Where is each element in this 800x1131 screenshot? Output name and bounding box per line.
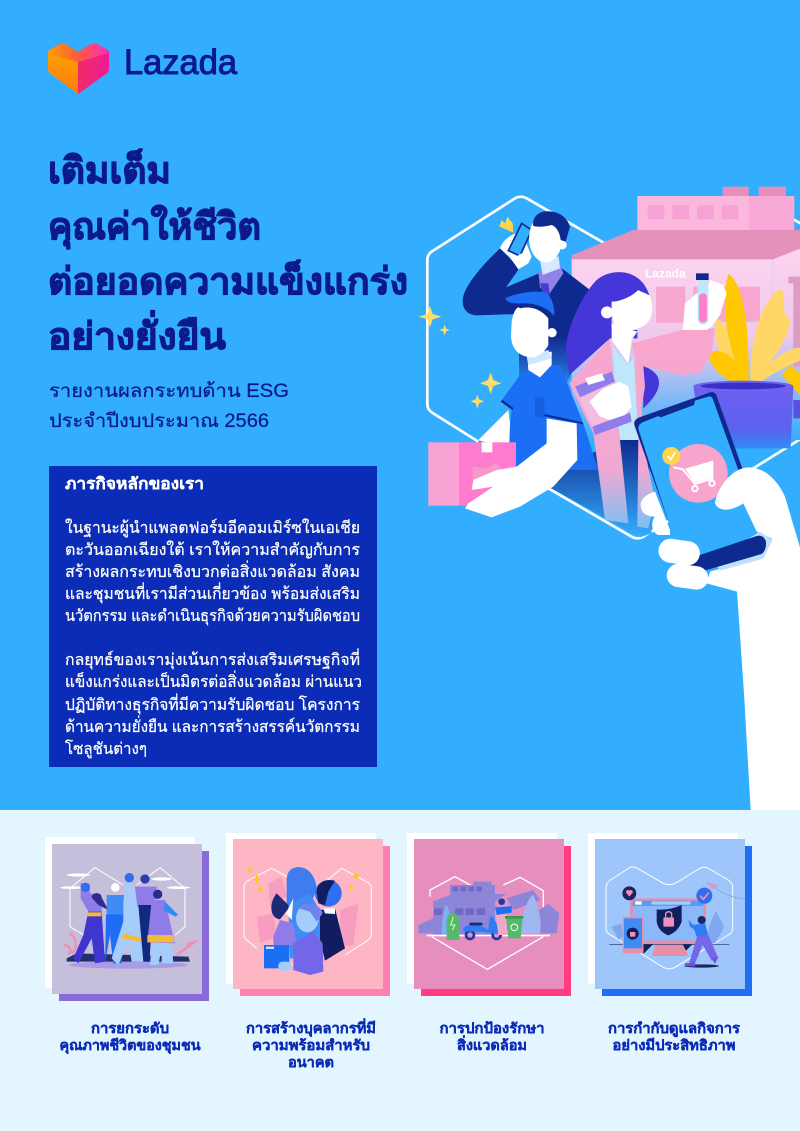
title: คุณค่าให้ชีวิต xyxy=(48,204,261,250)
man in suit xyxy=(463,211,590,383)
test tube xyxy=(698,279,708,324)
suit xyxy=(463,248,590,383)
caption xyxy=(246,1018,376,1070)
card face xyxy=(414,839,564,989)
paragraph 1: นวัตกรรม และดำเนินธุรกิจด้วยความรับผิดชอบ xyxy=(65,607,360,626)
caption: อนาคต xyxy=(288,1054,334,1070)
icon: Lazada heart xyxy=(48,44,109,94)
scooter xyxy=(465,930,475,940)
paragraph 2: ด้านความยั่งยืน และการสร้างสรรค์นวัตกรรม xyxy=(65,715,360,736)
cart badge xyxy=(669,444,728,503)
caption: การปกป้องรักษา xyxy=(440,1020,544,1036)
paragraph 2: ปฏิบัติทางธุรกิจที่มีความรับผิดชอบ โครงการ xyxy=(65,693,360,715)
icon: group of friends xyxy=(60,868,195,969)
panel: people xyxy=(226,833,390,1070)
face xyxy=(612,290,652,330)
woman in pink coat xyxy=(566,272,727,528)
plant xyxy=(708,274,800,395)
paragraph 2: โซลูชันต่างๆ xyxy=(65,739,147,759)
bin xyxy=(506,917,523,938)
holding hand and arm xyxy=(657,467,800,810)
caption: คุณภาพชีวิตของชุมชน xyxy=(60,1037,201,1054)
shield xyxy=(657,905,682,935)
caption: การยกระดับ xyxy=(91,1020,169,1036)
box xyxy=(428,442,459,506)
blouse xyxy=(613,347,638,440)
hair xyxy=(566,272,649,375)
panel background xyxy=(49,466,377,767)
woman xyxy=(287,867,317,907)
card white back xyxy=(45,837,195,988)
hair xyxy=(533,211,570,242)
caption: การกำกับดูแลกิจการ xyxy=(608,1020,741,1037)
caption xyxy=(60,1020,201,1054)
palm shadow xyxy=(713,532,773,571)
charger xyxy=(447,913,459,940)
caption: การสร้างบุคลากรที่มี xyxy=(246,1018,376,1037)
neck xyxy=(539,257,560,275)
friend 5 xyxy=(153,890,162,899)
badges xyxy=(622,886,636,900)
subtitle xyxy=(49,381,289,432)
panel: our mission xyxy=(49,466,377,767)
store chimneys xyxy=(723,187,749,197)
subtitle: ประจำปีงบประมาณ 2566 xyxy=(49,410,269,432)
friend 4 xyxy=(140,874,150,884)
friend 2 xyxy=(111,883,120,892)
store upper floor xyxy=(637,196,749,231)
caption: อย่างมีประสิทธิภาพ xyxy=(612,1037,736,1053)
logo wordmark: Lazada xyxy=(124,43,238,82)
caption xyxy=(440,1020,544,1053)
card shadow xyxy=(421,846,571,996)
card face xyxy=(52,844,202,994)
carrying arm and hand xyxy=(465,418,577,517)
panel: governance xyxy=(588,833,752,1053)
fingers xyxy=(657,537,701,567)
raised hand xyxy=(683,280,727,330)
panel: community xyxy=(45,837,209,1054)
phone frame xyxy=(634,392,769,574)
phone screen xyxy=(638,397,762,563)
person xyxy=(498,898,505,905)
coat xyxy=(569,328,715,528)
caption: ความพร้อมสำหรับ xyxy=(252,1037,370,1053)
lower floor shade xyxy=(548,440,652,537)
background: blue upper section xyxy=(0,0,800,810)
flash lines xyxy=(499,217,513,233)
card shadow xyxy=(602,846,752,996)
head xyxy=(529,214,562,262)
card face xyxy=(233,839,383,989)
card white back xyxy=(226,833,376,984)
person xyxy=(684,964,719,968)
sparkles xyxy=(419,306,501,409)
shirt xyxy=(501,365,598,470)
icon: workforce team xyxy=(244,867,371,975)
hair xyxy=(520,303,557,332)
title: เติมเต็ม xyxy=(48,147,171,191)
title: อย่างยั่งยืน xyxy=(48,310,226,357)
left fingertips xyxy=(641,492,670,535)
phone in hand xyxy=(634,392,769,574)
store windows xyxy=(656,287,685,323)
left arm xyxy=(478,410,510,447)
paragraph 1 xyxy=(65,518,360,626)
card white back xyxy=(588,833,738,984)
neck xyxy=(527,352,552,377)
store sign: Lazada xyxy=(645,266,686,280)
phone xyxy=(623,917,643,953)
paragraph 1: สร้างผลกระทบเชิงบวกต่อสิ่งแวดล้อม สังคม xyxy=(65,560,360,581)
paragraph 2: แข็งแกร่งและเป็นมิตรต่อสิ่งแวดล้อม ผ่านแนว xyxy=(65,670,362,691)
box xyxy=(264,945,289,968)
paragraph 1: ในฐานะผู้นำแพลตฟอร์มอีคอมเมิร์ซในเอเชีย xyxy=(65,518,360,538)
paragraph 1: ตะวันออกเฉียงใต้ เราให้ความสำคัญกับการ xyxy=(65,540,360,559)
cap xyxy=(505,292,554,316)
title: ต่อยอดความแข็งแกร่ง xyxy=(48,258,408,302)
icon: security and person xyxy=(606,867,745,969)
background: pale lower section xyxy=(0,810,800,1131)
arm hand and phone xyxy=(500,232,532,269)
caption: สิ่งแวดล้อม xyxy=(457,1035,527,1053)
clipboard xyxy=(575,373,632,433)
card white back xyxy=(407,833,557,984)
title xyxy=(48,147,408,357)
panel heading: ภารกิจหลักของเรา xyxy=(65,475,204,493)
main illustration: people, store, phone xyxy=(419,187,800,810)
store roof xyxy=(572,230,800,259)
cart icon xyxy=(673,467,715,491)
lapels and tie xyxy=(538,265,563,295)
neck xyxy=(612,323,637,364)
store xyxy=(572,187,800,440)
subtitle: รายงานผลกระทบด้าน ESG xyxy=(49,381,289,402)
pot xyxy=(693,381,800,448)
card face xyxy=(595,839,745,989)
caption xyxy=(608,1020,741,1053)
hand on clipboard xyxy=(589,382,632,420)
arm xyxy=(707,467,800,810)
friend 1 xyxy=(81,883,102,912)
front man xyxy=(296,904,319,932)
phone bottom xyxy=(690,536,766,570)
head xyxy=(511,307,548,357)
check badge xyxy=(662,447,680,465)
store wall xyxy=(572,258,773,440)
logo: Lazada xyxy=(48,43,238,94)
panel: environment xyxy=(407,833,571,1053)
icon: green city and scooter xyxy=(418,877,559,969)
paragraph 2 xyxy=(65,648,362,759)
paragraph 1: และชุมชนที่เรามีส่วนเกี่ยวข้อง พร้อมส่งเสริม xyxy=(65,582,360,604)
delivery man xyxy=(428,292,598,517)
card shadow xyxy=(240,846,390,996)
card shadow xyxy=(59,851,209,1001)
man dark suit xyxy=(315,880,342,907)
friend 3 xyxy=(112,875,145,965)
monitor xyxy=(630,898,706,945)
paragraph 2: กลยุทธ์ของเรามุ่งเน้นการส่งเสริมเศรษฐกิจที่ xyxy=(65,648,360,670)
plant xyxy=(707,912,724,943)
hexagon outline xyxy=(427,197,800,538)
